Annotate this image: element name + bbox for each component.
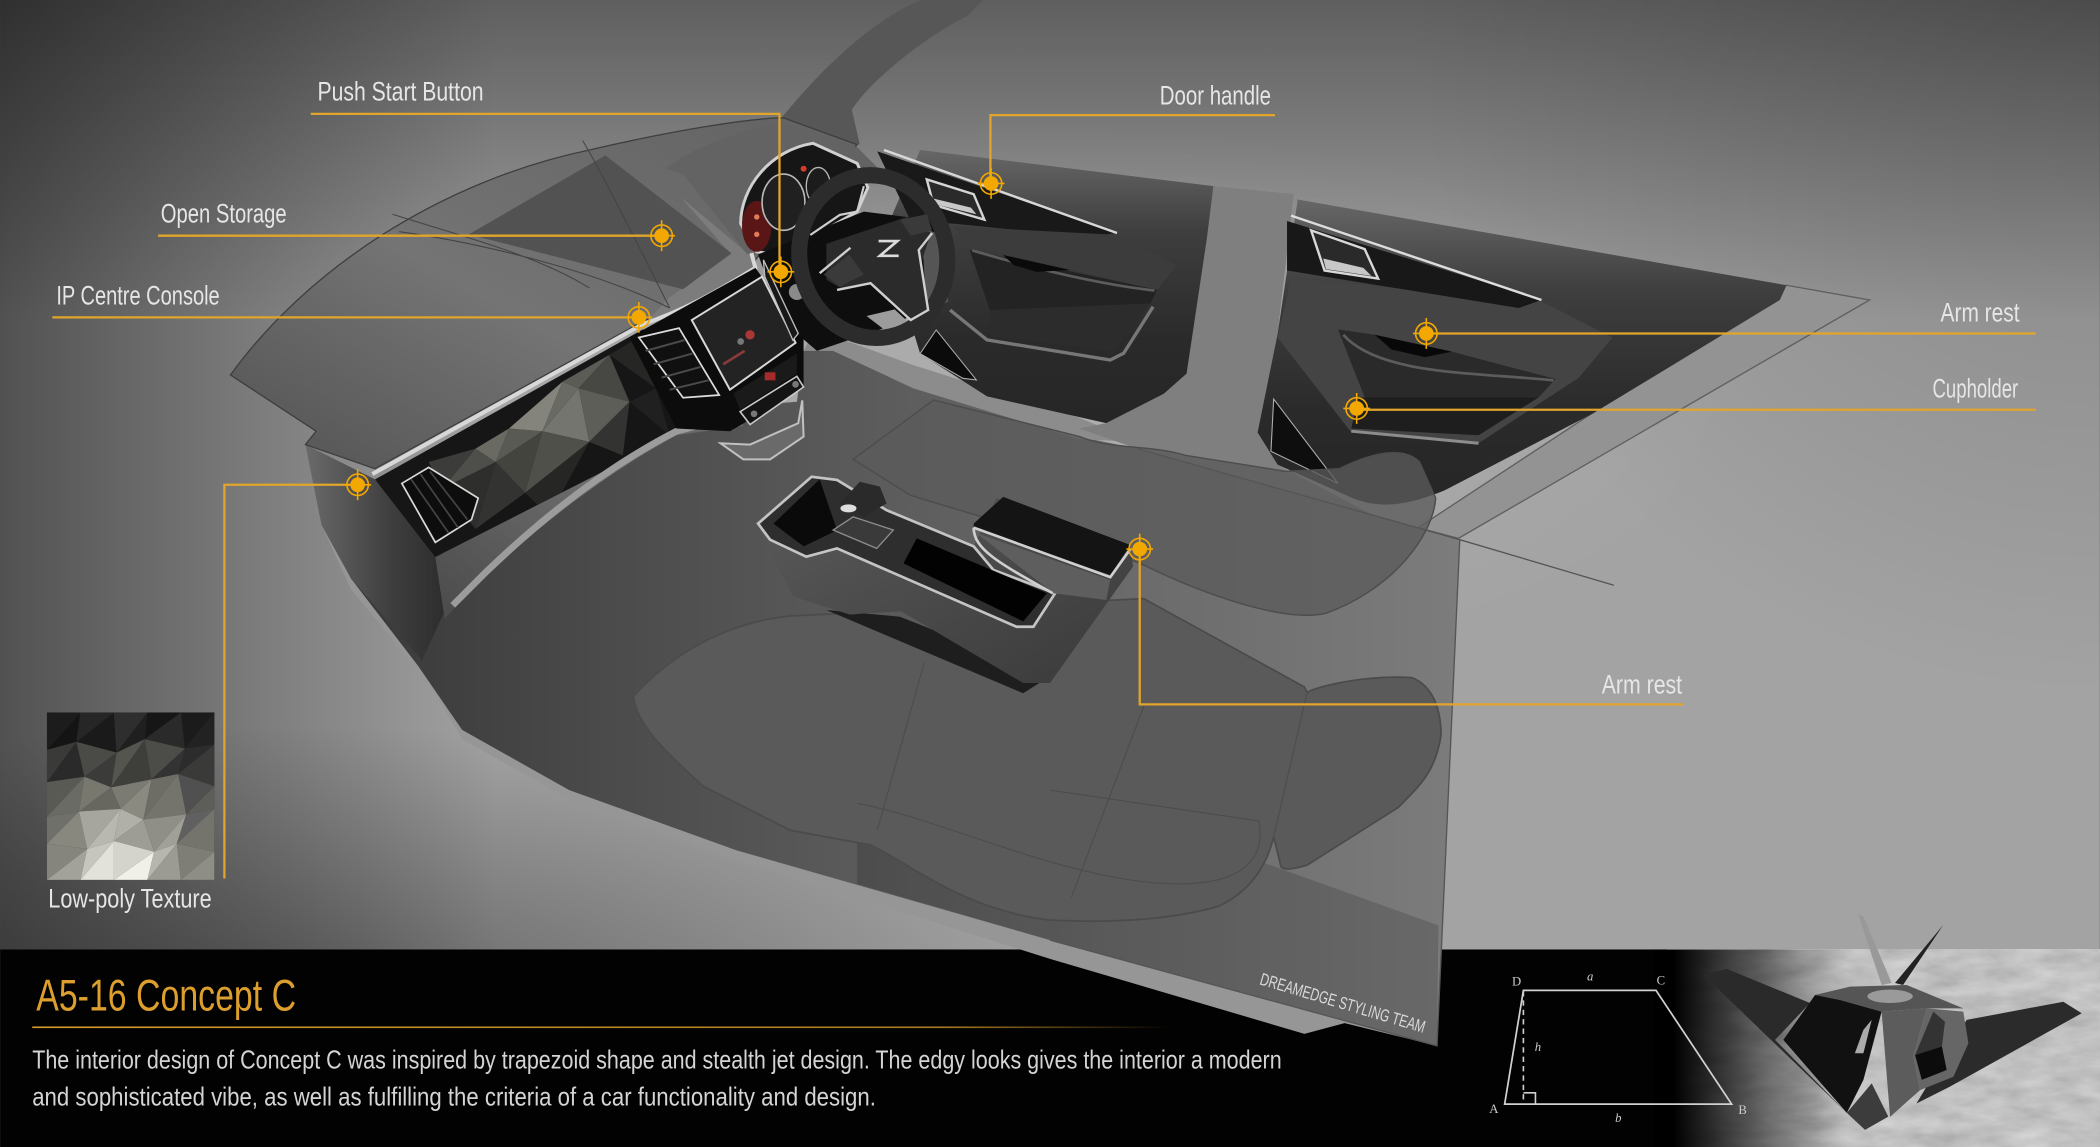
dash top surface	[230, 118, 857, 469]
callout: IP Centre Console: IP Centre Console	[56, 281, 220, 311]
steering column surround	[758, 212, 948, 351]
title: A5-16 Concept C	[36, 971, 296, 1020]
translucent plate lower band	[857, 723, 1438, 1046]
callout: Push Start Button: Push Start Button	[317, 76, 484, 106]
open storage lip	[646, 197, 755, 323]
floor and interior tub	[311, 346, 1460, 1046]
diagram: trapezoid: C	[1657, 973, 1665, 987]
description: The interior design of Concept C was inspired by trapezoid shape and stealth jet design. The edgy looks gives the interior a modern	[32, 1047, 1282, 1075]
dark wedge under dash	[305, 445, 449, 660]
team signature: DREAMEDGE STYLING TEAM	[1258, 969, 1428, 1037]
callout: Arm rest on door: Arm rest	[1941, 297, 2020, 327]
plate edge lines	[1050, 449, 1614, 1046]
instrument hood	[666, 123, 877, 254]
panel: bottom caption band	[0, 949, 2100, 1147]
callout: Door handle	[978, 80, 1275, 199]
silver trim along dash	[372, 253, 755, 474]
lower sill band	[804, 319, 1137, 442]
photo: stealth jet	[1704, 915, 2082, 1130]
knee bolster	[435, 407, 743, 619]
callout: Arm rest on door	[1413, 297, 2036, 349]
callout: low-poly texture leader	[224, 469, 371, 878]
low-poly centre trim panel	[375, 329, 676, 557]
description	[32, 1047, 1282, 1111]
rear door handle	[1311, 230, 1378, 279]
callout: Push Start Button	[311, 76, 794, 287]
callout: Cupholder: Cupholder	[1933, 374, 2018, 404]
console controls	[721, 354, 804, 459]
diagram: trapezoid: D	[1512, 975, 1521, 989]
front door panel	[877, 150, 1213, 423]
swatch caption: Low-poly Texture	[48, 883, 212, 913]
title rule	[32, 1026, 1171, 1028]
sketch lines over dash	[392, 141, 670, 308]
rear door panel	[1258, 200, 1787, 505]
photo: ground below stealth jet	[1654, 949, 2100, 1147]
callout: Arm rest on console	[1126, 534, 1683, 704]
diagram: trapezoid: b	[1615, 1111, 1621, 1125]
callout: Cupholder	[1343, 374, 2036, 424]
instrument cluster	[741, 143, 868, 254]
diagram: trapezoid: a	[1587, 969, 1593, 983]
callout: IP Centre Console	[52, 281, 652, 333]
diagram: trapezoid: A	[1489, 1102, 1499, 1116]
windscreen pillar	[779, 0, 983, 145]
centre air vent	[639, 328, 719, 398]
centre stack black surround	[630, 268, 804, 431]
bolster silver strip	[453, 415, 739, 605]
callout: Arm rest on console: Arm rest	[1602, 670, 1683, 700]
diagram: trapezoid: h	[1535, 1040, 1541, 1054]
diagram: trapezoid	[1489, 969, 1747, 1125]
centre pillar and door surround	[1079, 186, 1371, 514]
description: and sophisticated vibe, as well as fulfilling the criteria of a car functionality and design.	[32, 1083, 876, 1111]
front door handle	[927, 179, 984, 220]
rear door speaker	[1271, 399, 1338, 483]
centre console	[758, 477, 1133, 693]
front door speaker	[920, 330, 976, 380]
centre display	[692, 277, 796, 390]
callout: Open Storage	[158, 198, 675, 251]
diagram: trapezoid: B	[1738, 1103, 1747, 1117]
callout: Open Storage: Open Storage	[161, 198, 287, 228]
underside rim of interior	[321, 525, 1437, 1046]
rear seat outline	[853, 400, 1436, 615]
low-poly texture swatch	[47, 712, 214, 880]
left air vent	[402, 467, 478, 542]
callout: Door handle: Door handle	[1160, 80, 1271, 110]
front seat outline	[634, 599, 1441, 921]
steering wheel	[784, 161, 962, 352]
open storage tray	[469, 155, 731, 289]
translucent rear glass wedge	[1418, 285, 1870, 538]
